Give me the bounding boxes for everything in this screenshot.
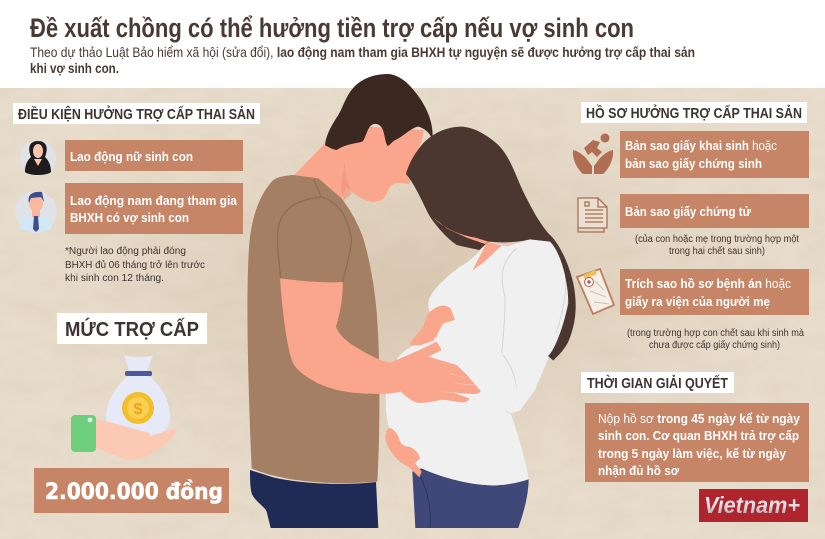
box: processing time: Nộp hồ sơ trong 45 ngày kể từ ngày xyxy=(598,411,801,426)
woman jeans xyxy=(412,468,529,528)
panel: allowance xyxy=(34,313,229,513)
note: medical record xyxy=(627,327,804,351)
heading: processing time xyxy=(581,372,734,393)
heading: allowance: MỨC TRỢ CẤP xyxy=(65,317,199,341)
box: medical record: giấy ra viện của người mẹ xyxy=(625,294,770,309)
box: male worker: BHXH có vợ sinh con xyxy=(70,210,189,225)
box: birth certificate: bản sao giấy chứng sinh xyxy=(625,156,762,171)
note: death certificate xyxy=(635,233,799,257)
icon: money bag in hand: $ xyxy=(134,401,143,418)
note: medical record: (trong trường hợp con chết sau khi sinh mà xyxy=(627,327,804,339)
note: death certificate: (của con hoặc mẹ trong trường hợp một xyxy=(635,233,799,245)
panel: documents xyxy=(573,102,809,351)
icon: hands holding baby xyxy=(573,134,613,174)
box: birth certificate: Bản sao giấy khai sinh hoặc xyxy=(625,138,777,153)
box: medical record xyxy=(620,269,809,315)
box: male worker: Lao động nam đang tham gia xyxy=(70,193,238,208)
footnote: BHXH đủ 06 tháng trở lên trước xyxy=(65,259,205,271)
icon: document xyxy=(578,198,607,232)
note: death certificate: trong hai chết sau sinh) xyxy=(669,245,765,257)
heading: allowance xyxy=(57,313,207,344)
man hair xyxy=(325,74,433,150)
icon: female worker xyxy=(20,140,56,176)
box: processing time: trong 5 ngày làm việc, kế từ ngày xyxy=(598,446,787,461)
woman upper hand xyxy=(410,306,455,345)
box: processing time: sinh con. Cơ quan BHXH trả trợ cấp xyxy=(598,428,799,443)
illustration: couple xyxy=(247,74,576,528)
box: birth certificate xyxy=(620,131,809,178)
box: female worker: Lao động nữ sinh con xyxy=(70,149,193,164)
box: death certificate: Bản sao giấy chứng tử xyxy=(625,204,752,219)
icon: male worker xyxy=(15,191,57,233)
icon: medical record xyxy=(577,269,614,314)
woman hair xyxy=(406,127,576,361)
box: death certificate xyxy=(620,194,809,228)
box: amount: 2.000.000 đồng xyxy=(45,480,223,505)
box: female worker xyxy=(65,140,243,171)
box: medical record: Trích sao hồ sơ bệnh án hoặc xyxy=(625,276,791,291)
panel: processing time xyxy=(581,372,809,482)
icon: money bag in hand xyxy=(71,355,177,460)
man jeans xyxy=(250,470,378,528)
woman shirt xyxy=(386,239,568,485)
heading: processing time: THỜI GIAN GIẢI QUYẾT xyxy=(587,374,728,392)
note: medical record: chưa được cấp giấy chứng sinh) xyxy=(649,339,780,351)
intro text: Theo dự thảo Luật Bảo hiểm xã hội (sửa đổi), lao động nam tham gia BHXH tự nguyện sẽ được hưởng trợ cấp thai sản xyxy=(30,44,695,60)
box: amount xyxy=(34,468,229,513)
woman sleeve over belly xyxy=(437,321,517,413)
intro text: khi vợ sinh con. xyxy=(30,60,119,76)
man neck and face xyxy=(293,127,423,202)
box: male worker xyxy=(65,183,243,234)
man arm and hand xyxy=(280,278,481,403)
intro text xyxy=(30,44,695,76)
finger gaps xyxy=(443,373,475,393)
box: processing time xyxy=(585,403,809,482)
heading: eligibility xyxy=(13,103,260,124)
woman lower hand xyxy=(386,428,422,477)
footnote xyxy=(65,246,205,284)
footnote: khi sinh con 12 tháng. xyxy=(65,273,164,284)
title: Đề xuất chồng có thể hưởng tiền trợ cấp nếu vợ sinh con xyxy=(30,13,634,43)
panel: eligibility xyxy=(13,103,260,284)
footnote: *Người lao động phải đóng xyxy=(65,246,186,257)
logo: Vietnam+: Vietnam+ xyxy=(704,492,800,518)
box: processing time: nhận đủ hồ sơ xyxy=(598,463,680,478)
man shirt xyxy=(247,175,379,483)
woman neckline xyxy=(472,242,502,271)
heading: eligibility: ĐIỀU KIỆN HƯỞNG TRỢ CẤP THAI SẢN xyxy=(18,105,255,123)
